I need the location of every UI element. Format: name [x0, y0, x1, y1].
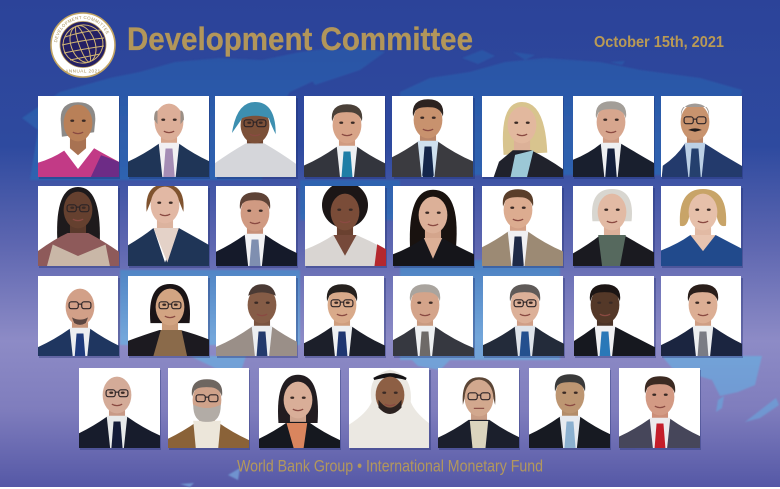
portrait row 2, photo 8: blonde woman in blue [661, 186, 742, 266]
logo: Development Committee annual 2021 seal: DEVELOPMENT COMMITTEE [54, 16, 110, 42]
title: Development Committee [127, 21, 473, 57]
portrait row 1, photo 1: woman in pink sari [38, 96, 119, 177]
footer text: World Bank Group • International Monetary Fund [237, 456, 543, 476]
portrait row 2, photo 4: woman with dark curly hair, red and white dress [305, 186, 386, 266]
portrait row 4, photo 5: woman with glasses, black blazer [438, 368, 519, 448]
portrait row 2, photo 2: woman with short auburn hair, navy jacket [128, 186, 209, 266]
portrait row 4, photo 6: man in black suit, light blue tie [529, 368, 610, 448]
portrait row 3, photo 4: man in black suit, blue tie [304, 276, 385, 356]
portrait row 1, photo 3: woman with teal headwrap, white shawl [215, 96, 296, 177]
portrait row 2, photo 3: man in black suit, striped tie [216, 186, 297, 266]
portrait row 3, photo 7: man in black suit, bright blue tie [574, 276, 655, 356]
portrait row 2, photo 1: woman with braids, patterned scarf [38, 186, 119, 266]
portrait row 1, photo 4: smiling man, teal tie [304, 96, 385, 177]
portrait row 1, photo 5: man in gray suit [392, 96, 473, 177]
portrait row 2, photo 5: woman with long dark hair, black jacket [393, 186, 474, 266]
date: October 15th, 2021 [594, 34, 724, 51]
portrait row 4, photo 1: older man with glasses, dark suit [79, 368, 160, 448]
photo shadows [39, 98, 743, 450]
portrait row 2, photo 6: man in tan suit [482, 186, 563, 266]
portrait row 4, photo 7: man in gray suit, red tie [619, 368, 700, 448]
portrait row 1, photo 2: bald man, navy suit [128, 96, 209, 177]
portrait row 2, photo 7: woman with white hair, black jacket and scarf [573, 186, 654, 266]
portrait row 3, photo 5: gray-haired man, dark gray suit [393, 276, 474, 356]
portrait row 1, photo 8: man with moustache, blue suit [661, 96, 742, 177]
portrait row 3, photo 1: bald man, blue suit [38, 276, 119, 356]
portrait row 3, photo 2: woman with dark hair and patterned scarf [128, 276, 209, 356]
portrait row 1, photo 6: blonde woman, floral blouse [482, 96, 563, 177]
portrait row 1, photo 7: man with gray hair, dark suit [573, 96, 654, 177]
portrait row 4, photo 2: bearded man with glasses, brown jacket [168, 368, 249, 448]
portrait row 3, photo 6: man with glasses, navy suit, blue tie [483, 276, 564, 356]
logo: Development Committee annual 2021 seal [50, 12, 116, 78]
portrait row 4, photo 4: man in white thobe and keffiyeh [349, 368, 429, 448]
logo: Development Committee annual 2021 seal: ANNUAL 2021 [65, 68, 101, 74]
portrait row 3, photo 8: dark-haired man, navy suit [661, 276, 742, 356]
portrait row 3, photo 3: man in gray-tan suit [216, 276, 297, 356]
portrait row 4, photo 3: woman with dark hair, black jacket and scarf [259, 368, 340, 448]
